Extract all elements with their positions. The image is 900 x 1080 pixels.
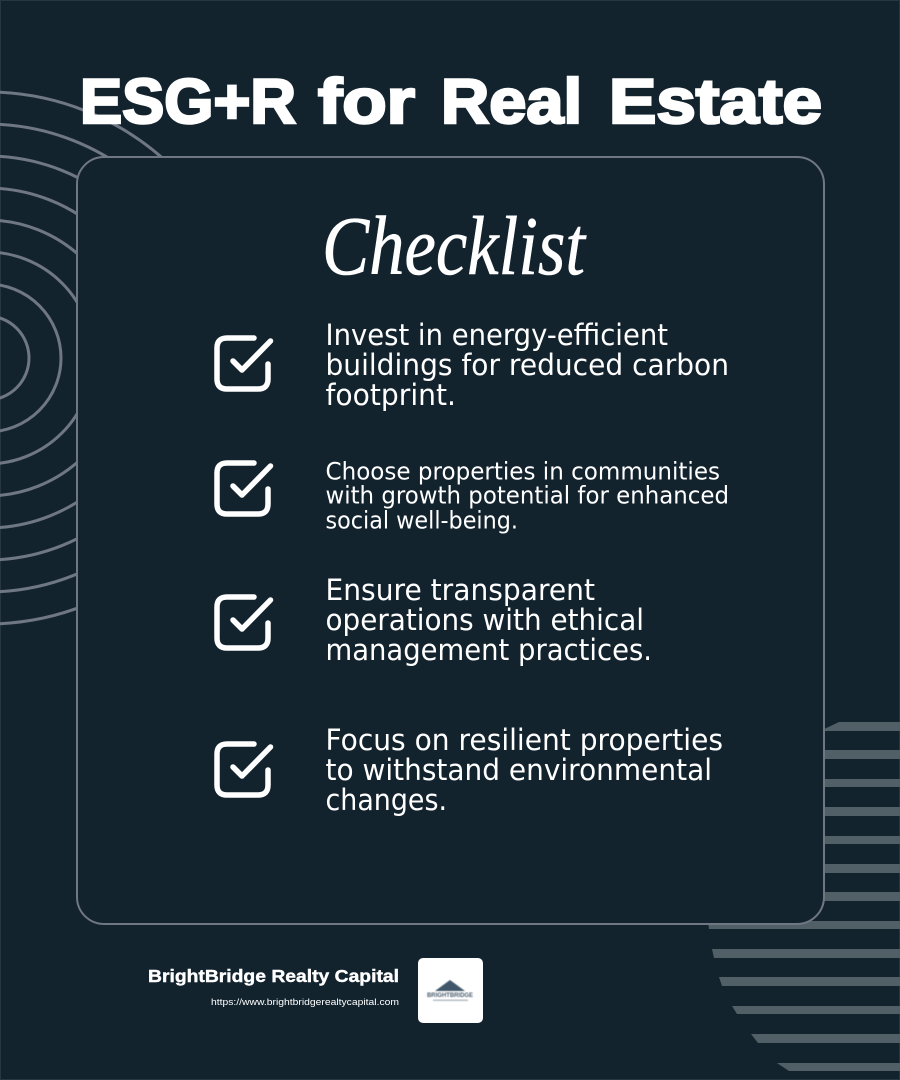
icon: checkbox 4 (217, 744, 270, 795)
checklist item 3 (217, 573, 652, 667)
text: item 3: operations with ethical (326, 603, 644, 637)
text: item 4 (326, 723, 723, 817)
text: item 2: Choose properties in communities (326, 458, 720, 486)
icon: checkbox 3 (217, 597, 270, 648)
footer: website url: https://www.brightbridgerealtycapital.com (211, 997, 399, 1008)
title: Real (441, 67, 582, 137)
panel: checklist (77, 157, 824, 924)
footer: company name: BrightBridge Realty Capital (148, 966, 399, 986)
icon: checkbox 2 (217, 463, 270, 514)
text: item 1: buildings for reduced carbon (326, 348, 729, 382)
title (80, 67, 822, 137)
panel background (77, 157, 824, 924)
checklist item 2 (217, 458, 729, 534)
text: item 1 (326, 318, 729, 412)
text: item 3: Ensure transparent (326, 573, 595, 607)
title: for (318, 67, 415, 137)
text: item 3 (326, 573, 652, 667)
title: Estate (609, 67, 822, 137)
decorative striped circle (708, 722, 900, 1071)
decorative concentric rings (0, 92, 253, 624)
checklist item 1 (217, 318, 729, 412)
logo (418, 958, 483, 1023)
icon: checkbox 1 (217, 338, 270, 389)
text: item 4: Focus on resilient properties (326, 723, 723, 757)
text: item 2: with growth potential for enhanced (326, 482, 729, 510)
text: item 1: Invest in energy-efficient (326, 318, 668, 352)
text: item 3: management practices. (326, 633, 652, 667)
text: item 4: to withstand environmental (326, 753, 712, 787)
text: item 1: footprint. (326, 378, 456, 412)
text: item 2: social well-being. (326, 506, 518, 534)
title: ESG+R (80, 67, 296, 137)
heading: Checklist: Checklist (322, 200, 587, 293)
checklist item 4 (217, 723, 723, 817)
logo: BRIGHTBRIDGE (427, 992, 474, 999)
text: item 4: changes. (326, 783, 447, 817)
text: item 2 (326, 458, 729, 534)
